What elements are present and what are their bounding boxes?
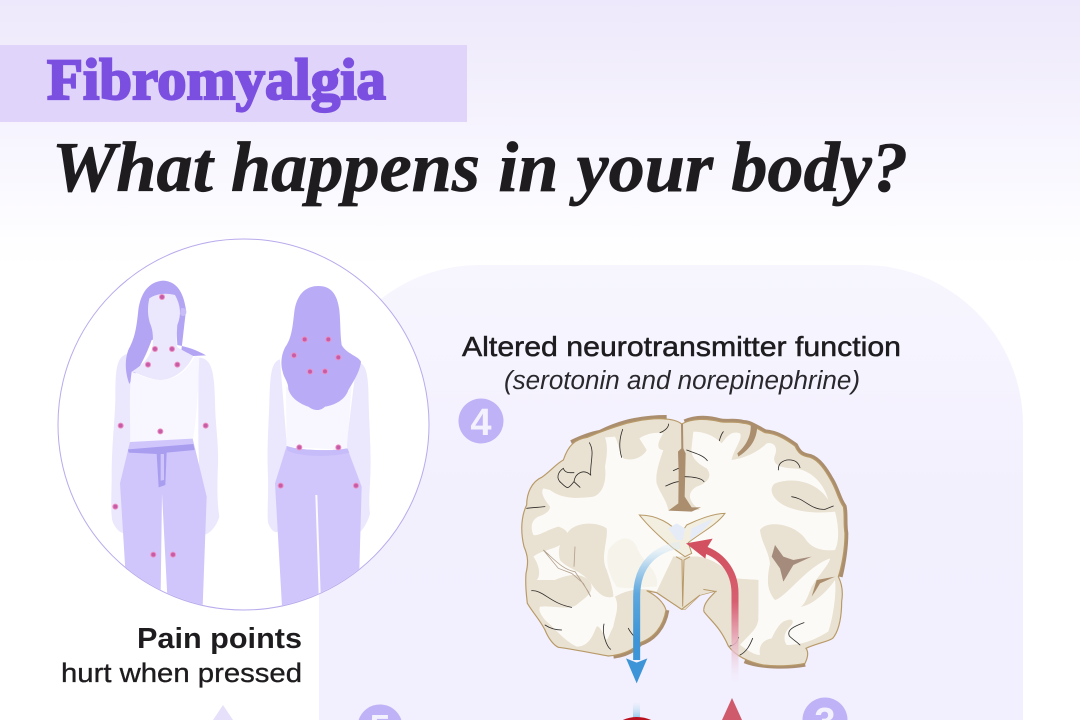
label: pain points bbox=[61, 623, 302, 688]
brain tissue bbox=[522, 419, 845, 666]
headline: What happens in your body? bbox=[52, 129, 908, 207]
title tag: Fibromyalgia bbox=[0, 45, 467, 122]
midline fissure bbox=[668, 424, 701, 512]
arrow stub: blue rising to red node bbox=[633, 703, 640, 718]
illustration: brain cross-section bbox=[522, 418, 845, 666]
heading: altered neurotransmitter function: Altered neurotransmitter function bbox=[462, 331, 901, 362]
title tag: Fibromyalgia: Fibromyalgia bbox=[47, 47, 386, 112]
arrow: red ascending bbox=[686, 539, 735, 683]
sulci bbox=[527, 424, 833, 655]
header background bbox=[0, 0, 1080, 265]
badge 3 bbox=[802, 698, 848, 720]
figure: front view bbox=[111, 281, 219, 607]
arrowhead: red upward bbox=[722, 698, 742, 720]
label: pain points: Pain points bbox=[137, 623, 302, 655]
badge 5 bbox=[359, 704, 401, 720]
badge 4: 4 bbox=[470, 402, 492, 444]
subheading: serotonin and norepinephrine: (serotonin and norepinephrine) bbox=[504, 367, 860, 395]
figure: back view bbox=[268, 286, 371, 607]
badge 4 bbox=[458, 398, 504, 444]
arrowhead: pale upward bbox=[213, 705, 233, 720]
arrow: blue descending bbox=[626, 545, 680, 683]
panel: neurotransmitter background bbox=[319, 265, 1023, 720]
internal folds bbox=[543, 547, 591, 597]
white matter bbox=[532, 432, 838, 655]
outer brown edge bbox=[572, 418, 845, 665]
node: red circle bbox=[623, 717, 651, 720]
pain points markers bbox=[113, 294, 358, 557]
deep grey matter bbox=[559, 524, 613, 597]
ventricles bbox=[639, 513, 725, 557]
label: pain points: hurt when pressed bbox=[61, 658, 302, 688]
panel: pain points circle bbox=[58, 239, 429, 610]
